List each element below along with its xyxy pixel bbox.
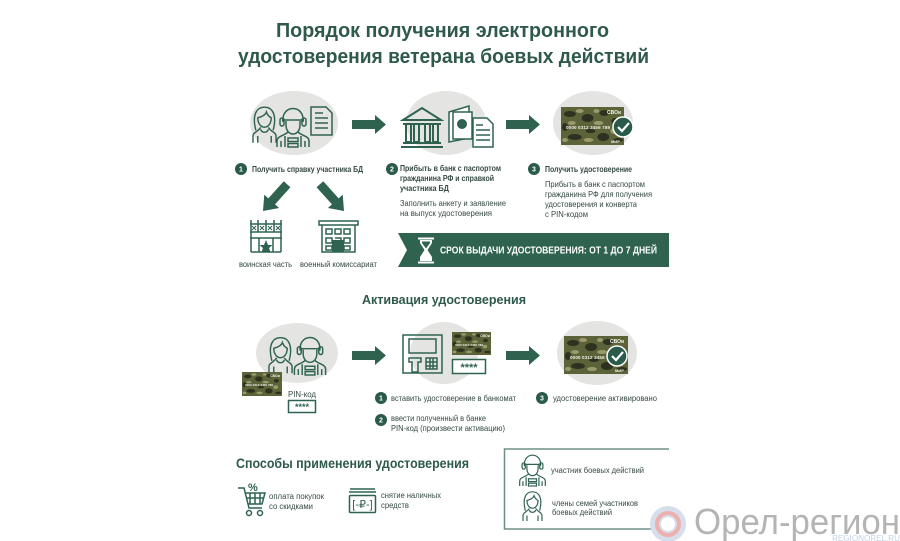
arrow: step 2 to step 3: [506, 115, 540, 134]
icon: bank with passport and document: [401, 91, 493, 155]
text: cash withdrawal: снятие наличных: [381, 491, 441, 500]
panel: legend: [504, 449, 669, 529]
banner: issue term: [398, 233, 669, 267]
icon: people with card and PIN: СВОи: [270, 374, 280, 378]
activation step 3 text: 3: [540, 396, 544, 402]
activation step 1 text: [375, 392, 516, 404]
step 2 text: Заполнить анкету и заявление: [400, 199, 507, 208]
activation step 1 text: 1: [379, 396, 383, 402]
icon: veteran card with check: СВОи: [607, 110, 621, 116]
icon: activated card with check: [557, 321, 637, 385]
text: payment with discounts: [269, 492, 324, 511]
step 2 text: гражданина РФ и справкой: [400, 174, 494, 183]
banner: issue term: СРОК ВЫДАЧИ УДОСТОВЕРЕНИЯ: ОТ 1 ДО 7 ДНЕЙ: [440, 244, 657, 256]
legend: family text: члены семей участников: [552, 499, 638, 508]
text: payment with discounts: оплата покупок: [269, 492, 324, 501]
step 3 text: [528, 163, 652, 219]
arrow: activation step 2 to 3: [506, 346, 540, 365]
step 3 text: гражданина РФ для получения: [545, 190, 652, 199]
step 2 text: Прибыть в банк с паспортом: [400, 164, 501, 173]
icon: ATM with card and PIN: ****: [460, 362, 478, 374]
icon: people with card and PIN: [242, 323, 338, 412]
icon: veteran card with check: 0000 0312 3456 789: [566, 125, 610, 130]
icon: cash withdrawal: [-₽-]: [352, 499, 373, 511]
step 2 text: участника БД: [400, 184, 449, 193]
step 2 text: 2: [390, 166, 394, 174]
text: cash withdrawal: средств: [381, 501, 409, 510]
step 3 text: удостоверения и конверта: [545, 200, 638, 209]
label: military commissariat: военный комиссариат: [300, 260, 377, 269]
icon: veteran card with check: МИР: [611, 139, 620, 144]
step 3 text: Получить удостоверение: [545, 165, 632, 174]
step 3 text: с PIN-кодом: [545, 210, 588, 219]
activation step 2 text: ввести полученный в банке: [391, 414, 487, 423]
arrow: down-left to military unit: [256, 178, 295, 218]
step 1 text: Получить справку участника БД: [252, 165, 363, 174]
icon: shopping cart with percent: %: [248, 482, 258, 494]
step 2 text: [386, 163, 507, 218]
activation step 1 text: вставить удостоверение в банкомат: [391, 394, 516, 403]
icon: people with document: [250, 91, 338, 155]
icon: cash withdrawal: [349, 489, 376, 512]
icon: people with card and PIN: 0000 0312 3456 789: [245, 383, 273, 387]
step 3 text: Прибыть в банк с паспортом: [545, 180, 645, 189]
icon: activated card with check: СВОи: [610, 339, 624, 345]
step 1 text: 1: [239, 166, 243, 174]
activation step 2 text: 2: [379, 418, 383, 424]
icon: ATM with card and PIN: СВОи: [480, 334, 490, 338]
step 2 text: на выпуск удостоверения: [400, 209, 492, 218]
icon: ATM with card and PIN: [403, 322, 491, 384]
text: cash withdrawal: [381, 491, 441, 510]
legend: participant text: участник боевых действий: [551, 466, 644, 475]
title: удостоверения ветерана боевых действий: [238, 46, 649, 68]
icon: people with card and PIN: PIN-код: [288, 390, 316, 399]
activation step 2 text: [375, 414, 505, 433]
icon: activated card with check: МИР: [615, 368, 624, 373]
arrow: activation step 1 to 2: [352, 346, 386, 365]
legend: participant icon: [520, 455, 545, 486]
icon: military unit: [250, 220, 282, 252]
title: [238, 20, 649, 68]
arrow: down-right to commissariat: [312, 178, 351, 218]
heading: activation: Активация удостоверения: [362, 292, 526, 307]
legend: family text: [552, 499, 638, 517]
legend: family text: боевых действий: [552, 508, 612, 517]
step 1 text: [235, 163, 363, 175]
icon: military commissariat: [319, 221, 358, 252]
label: military unit: воинская часть: [239, 260, 292, 269]
activation step 2 text: PIN-код (произвести активацию): [391, 424, 505, 433]
heading: ways of use: Способы применения удостоверения: [236, 455, 469, 471]
icon: people with card and PIN: ****: [295, 402, 309, 412]
activation step 3 text: [536, 392, 658, 404]
text: payment with discounts: со скидками: [269, 502, 313, 511]
icon: veteran card with check: [553, 91, 633, 155]
title: Порядок получения электронного: [276, 20, 609, 42]
legend: family icon: [523, 492, 542, 521]
activation step 3 text: удостоверение активировано: [553, 394, 658, 403]
icon: activated card with check: 0000 0312 3456 789: [570, 355, 614, 360]
icon: ATM with card and PIN: 0000 0312 3456 789: [455, 343, 483, 347]
arrow: step 1 to step 2: [352, 115, 386, 134]
step 3 text: 3: [532, 166, 536, 174]
icon: shopping cart with percent: [238, 482, 265, 516]
